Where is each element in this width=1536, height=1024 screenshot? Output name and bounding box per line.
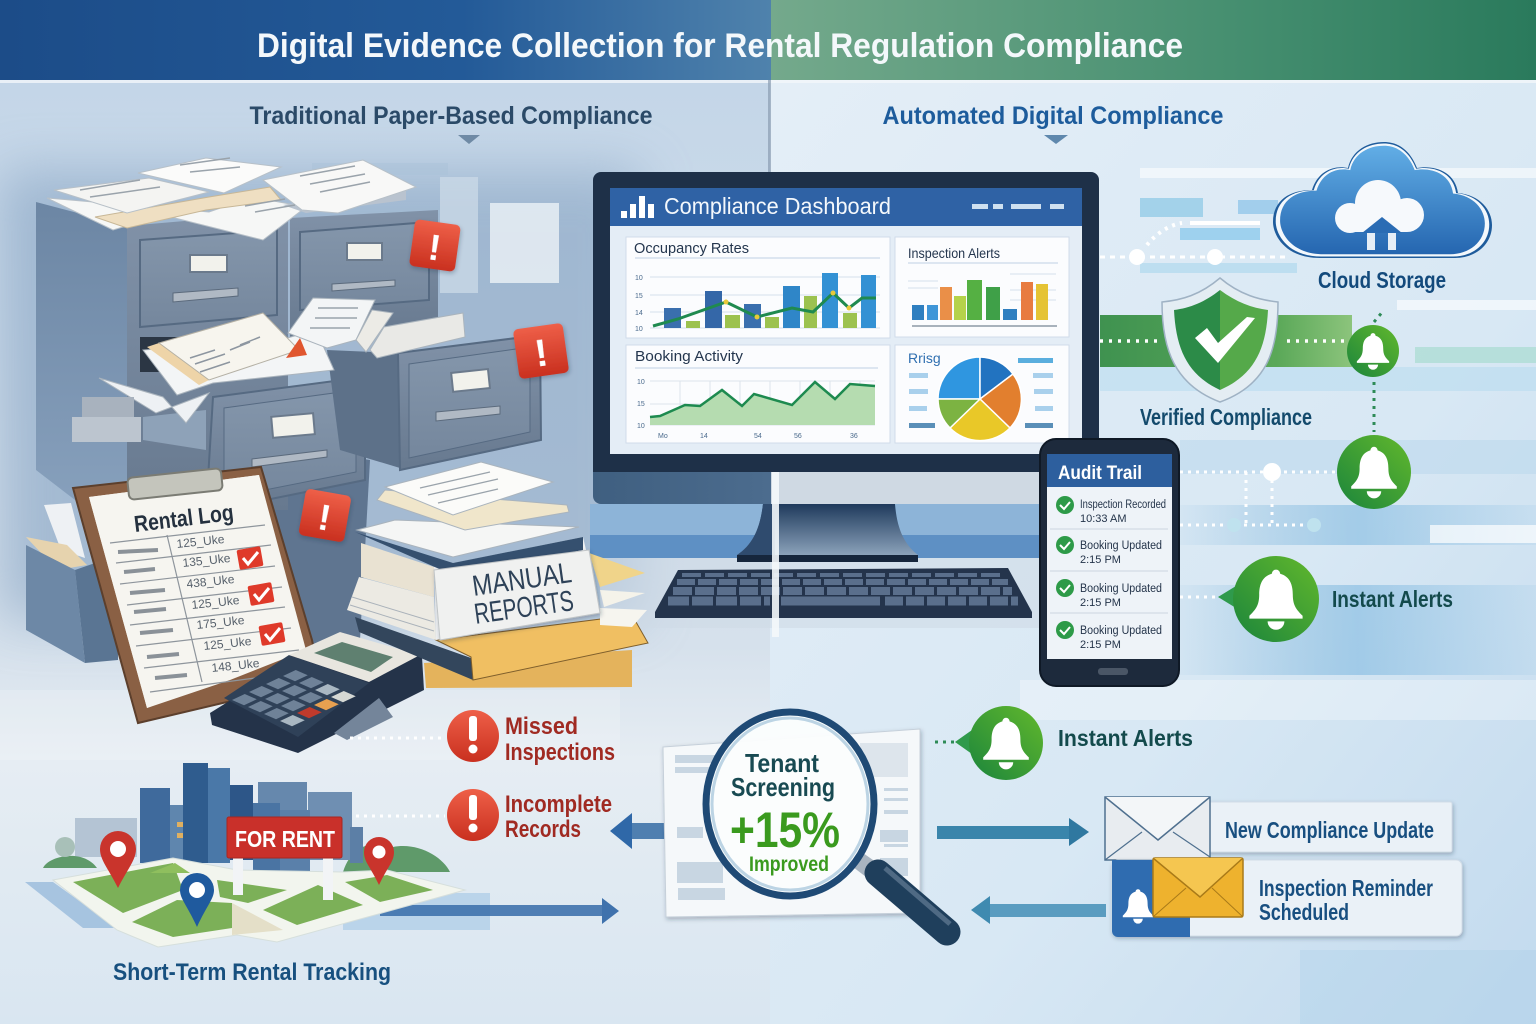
magnifier: +15% <box>730 802 840 858</box>
keyboard <box>655 568 1032 618</box>
arrow: screening to email <box>937 818 1089 846</box>
white seam below divider <box>772 472 779 637</box>
top stack <box>47 197 306 240</box>
monitor stand left <box>737 504 775 555</box>
chart: occupancy rates: 14 <box>635 310 643 317</box>
drawer stack <box>99 378 209 423</box>
alert badge: lower <box>298 488 352 543</box>
clipboard: rental log <box>73 467 320 723</box>
magnifier: Improved <box>749 853 829 876</box>
heading: automated <box>882 102 1224 144</box>
chart: occupancy rates: 15 <box>635 293 643 300</box>
upper right cabinet <box>290 210 438 340</box>
background: left paper side <box>0 80 770 1024</box>
audit item 1: Inspection Recorded <box>1080 499 1166 511</box>
notification: inspection reminder <box>1112 858 1462 937</box>
chart: booking activity: 15 <box>637 401 645 408</box>
chart: inspection alerts <box>895 237 1069 337</box>
icon: bell small <box>1123 889 1153 924</box>
centre divider <box>768 80 771 475</box>
box behind clipboard <box>26 503 118 663</box>
monitor stand <box>737 504 918 555</box>
chart: booking activity: 10 <box>637 423 645 430</box>
check marks <box>236 546 286 646</box>
magnifier: Screening <box>731 772 835 802</box>
connectors: phone network <box>1180 463 1336 532</box>
connectors: shield row <box>1100 339 1348 343</box>
icon: envelope white <box>1105 797 1210 860</box>
heading: traditional <box>250 102 653 144</box>
monitor chin <box>593 472 771 504</box>
chart: booking activity: 10 <box>637 379 645 386</box>
map label: Short-Term Rental Tracking <box>113 959 391 986</box>
chart: occupancy rates <box>626 237 890 338</box>
clipboard title: Rental Log <box>133 499 235 537</box>
chart: booking activity: 54 <box>754 433 762 440</box>
magnifier text: Tenant <box>745 748 819 778</box>
pin: red right <box>364 837 394 885</box>
audit item 2 <box>1050 536 1168 571</box>
left cabinet front <box>127 212 288 510</box>
alert badge: lower: ! <box>315 496 334 539</box>
chart: booking activity: Booking Activity <box>635 348 744 365</box>
manual reports label: MANUAL <box>470 557 574 603</box>
dashboard header <box>610 188 1082 226</box>
document behind magnifier <box>663 729 920 917</box>
map shadow <box>25 882 117 928</box>
chart: booking activity: 36 <box>850 433 858 440</box>
chart: booking activity: 14 <box>700 433 708 440</box>
notification: new compliance update: New Compliance Update <box>1225 817 1434 843</box>
icon: envelope yellow <box>1153 858 1243 917</box>
stack of manual reports <box>347 462 648 688</box>
chart: risk pie <box>895 345 1069 443</box>
connector: bell to bell <box>1374 310 1384 432</box>
cabinet body lower <box>127 420 370 660</box>
audit item 4: 2:15 PM <box>1080 639 1121 651</box>
audit item 4: Booking Updated <box>1080 625 1162 637</box>
cloud label: Cloud Storage <box>1318 267 1446 293</box>
manual reports label: REPORTS <box>472 585 576 631</box>
map sheet <box>53 858 465 947</box>
label: instant alerts lower: Instant Alerts <box>1058 725 1193 751</box>
connector: cloud to dashboard <box>1100 221 1290 265</box>
audit item 1 <box>1050 496 1168 529</box>
calculator <box>210 632 424 753</box>
bell: instant alerts lower <box>935 706 1043 780</box>
shield label: Verified Compliance <box>1140 404 1312 430</box>
phone: audit trail <box>1040 439 1179 686</box>
monitor <box>593 172 1099 562</box>
label: instant alerts right: Instant Alerts <box>1332 586 1453 612</box>
notification: new compliance update <box>1105 797 1452 860</box>
audit item 2: 2:15 PM <box>1080 554 1121 566</box>
bell: instant alerts right <box>1180 556 1319 642</box>
open drawer lower centre <box>143 377 365 512</box>
audit item 4 <box>1056 621 1162 651</box>
clipboard: rental log: 438_Uke <box>186 572 235 591</box>
for rent sign: FOR RENT <box>235 826 335 852</box>
warning: missed inspections <box>350 710 615 766</box>
arrow: map to screening <box>343 893 619 930</box>
alert badge: top: ! <box>426 226 443 269</box>
chart: booking activity <box>626 345 890 443</box>
audit item 3: Booking Updated <box>1080 583 1162 595</box>
right drawer <box>327 335 541 470</box>
chart: booking activity: Mo <box>658 433 668 440</box>
bell: middle <box>1337 435 1411 509</box>
chart: booking activity: 56 <box>794 433 802 440</box>
notification: inspection reminder: Inspection Reminder <box>1259 875 1433 901</box>
left cabinet side <box>36 202 127 540</box>
loose paper piles <box>47 158 465 442</box>
audit item 3 <box>1050 579 1168 613</box>
bell: top <box>1347 325 1399 377</box>
skyline <box>43 763 450 880</box>
chart: occupancy rates: 10 <box>635 326 643 333</box>
header banner <box>0 0 1536 83</box>
pin: blue <box>180 873 214 927</box>
chart: inspection alerts: Inspection Alerts <box>908 245 1000 261</box>
clipboard: rental log: 125_Uke <box>203 634 252 653</box>
heading: traditional: Traditional Paper-Based Compliance <box>250 102 653 130</box>
arrow: records to screening <box>610 813 666 849</box>
dashboard header: Compliance Dashboard <box>664 193 891 219</box>
clipboard: rental log: 135_Uke <box>182 551 231 570</box>
cloud storage <box>1273 142 1492 258</box>
notification: inspection reminder: Scheduled <box>1259 899 1349 925</box>
alert badge: middle: ! <box>532 332 551 376</box>
heading: automated: Automated Digital Compliance <box>882 102 1224 130</box>
for rent sign <box>227 817 342 900</box>
audit item 1: 10:33 AM <box>1080 513 1126 525</box>
warning: missed inspections: Inspections <box>505 739 615 766</box>
warning: incomplete records <box>340 789 612 843</box>
audit item 2: Booking Updated <box>1080 540 1162 552</box>
pin: red left <box>100 831 136 888</box>
clipboard: rental log: 148_Uke <box>211 656 260 675</box>
clipboard: rental log: 125_Uke <box>191 593 240 612</box>
warning: incomplete records: Incomplete <box>505 791 612 818</box>
magnifier <box>706 712 950 932</box>
clipboard: rental log: 175_Uke <box>196 613 245 632</box>
chart: occupancy rates: 10 <box>635 275 643 282</box>
filing cabinets <box>36 202 541 660</box>
warning: missed inspections: Missed <box>505 713 578 740</box>
chart: risk pie: Rrisg <box>908 350 941 366</box>
log rows <box>110 525 300 692</box>
alert badge: middle <box>513 323 569 379</box>
title: Digital Evidence Collection for Rental Regulation Compliance <box>257 27 1183 65</box>
shield: verified compliance <box>1162 278 1278 402</box>
map: short-term rental tracking <box>25 763 465 947</box>
warning: incomplete records: Records <box>505 816 581 843</box>
background: right digital side <box>770 80 1536 1024</box>
manual reports label <box>434 550 600 640</box>
arrow: reminder to magnifier <box>971 896 1106 924</box>
alert badge: top <box>409 219 461 272</box>
phone title: Audit Trail <box>1058 463 1142 484</box>
audit item 3: 2:15 PM <box>1080 597 1121 609</box>
chart: occupancy rates: Occupancy Rates <box>634 240 749 257</box>
clipboard: rental log: 125_Uke <box>176 532 225 551</box>
